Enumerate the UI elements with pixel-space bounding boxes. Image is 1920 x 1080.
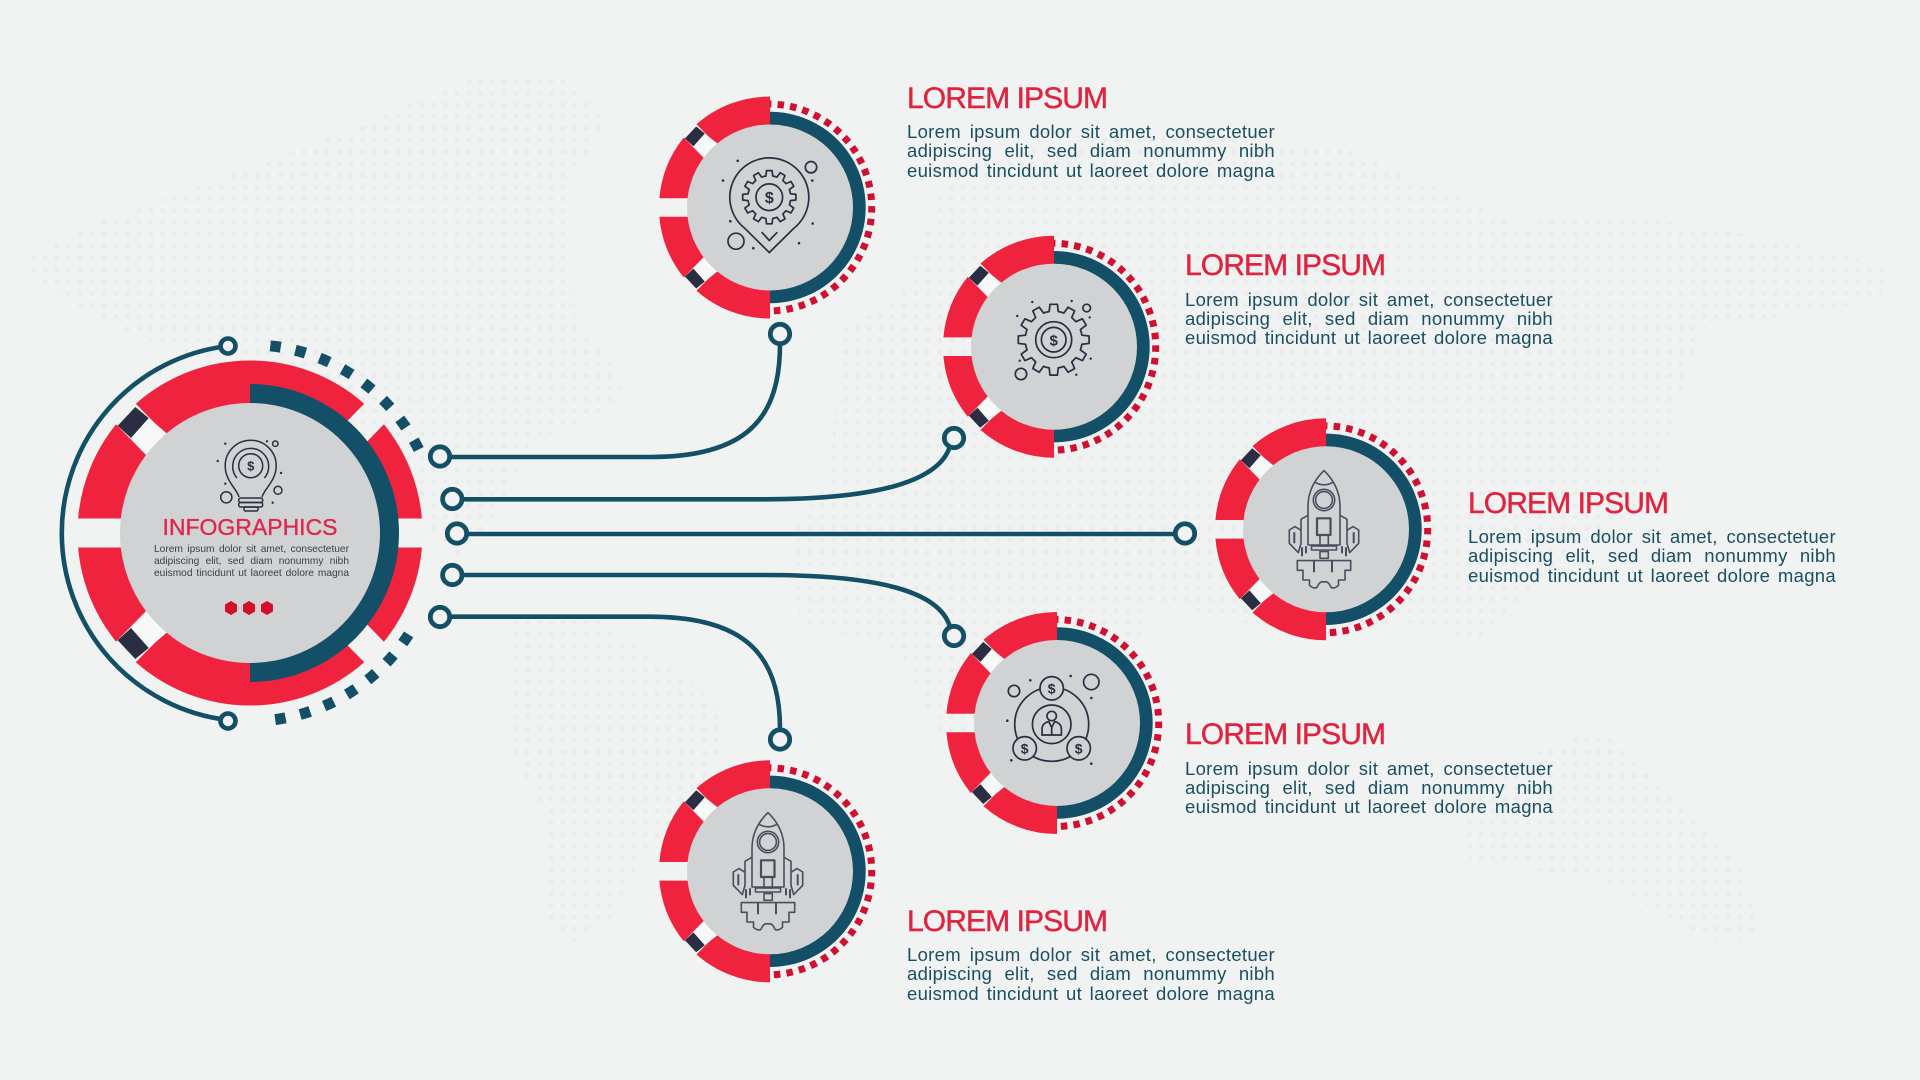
- text block: step 1: [907, 82, 1275, 181]
- text block: step 1: Lorem ipsum dolor sit amet, consectetuer: [907, 121, 1275, 142]
- icon: map pin with gear: [722, 158, 817, 253]
- outer arc with end nodes: [62, 338, 236, 728]
- main description: Lorem ipsum dolor sit amet, consectetuer: [154, 544, 349, 555]
- icon: gear with dollar: $: [1050, 333, 1059, 350]
- icon: people and money network: $: [1075, 740, 1083, 756]
- text block: step 4: adipiscing elit, sed diam nonummy nibh: [1185, 777, 1553, 798]
- text block: step 3: adipiscing elit, sed diam nonummy nibh: [1468, 545, 1836, 566]
- text block: step 2: euismod tincidunt ut laoreet dolore magna: [1185, 327, 1553, 348]
- background world map of dots: [30, 80, 1890, 945]
- icon: rocket: [733, 813, 803, 930]
- panel: main circle: [62, 338, 422, 728]
- text block: step 2: adipiscing elit, sed diam nonummy nibh: [1185, 308, 1553, 329]
- connector to step 2: [462, 446, 950, 499]
- panel: step 1 circle: [659, 96, 872, 318]
- connector end nodes: [430, 324, 1195, 749]
- text block: step 3: Lorem ipsum dolor sit amet, consectetuer: [1468, 526, 1836, 547]
- text block: step 3: LOREM IPSUM: [1468, 487, 1668, 520]
- panel: step 3 circle: [1215, 418, 1428, 640]
- text block: step 4: euismod tincidunt ut laoreet dolore magna: [1185, 796, 1553, 817]
- text block: step 5: Lorem ipsum dolor sit amet, consectetuer: [907, 944, 1275, 965]
- teal arc: [250, 384, 399, 682]
- red ring segments: [78, 360, 422, 706]
- icon: people and money network: $: [1048, 680, 1056, 696]
- text block: step 5: adipiscing elit, sed diam nonummy nibh: [907, 963, 1275, 984]
- gray disc: [120, 403, 380, 663]
- text block: step 2: Lorem ipsum dolor sit amet, consectetuer: [1185, 289, 1553, 310]
- text block: step 5: [907, 905, 1275, 1004]
- connector to step 3: [467, 532, 1175, 536]
- icon: map pin with gear: $: [765, 190, 774, 207]
- icon: people and money network: [1006, 674, 1099, 765]
- text block: step 4: LOREM IPSUM: [1185, 718, 1385, 751]
- icon: light bulb: $: [247, 458, 255, 474]
- connector to step 5: [450, 617, 780, 729]
- main description: [154, 544, 350, 579]
- panel: step 5 circle: [659, 760, 872, 982]
- text block: step 5: euismod tincidunt ut laoreet dolore magna: [907, 983, 1275, 1004]
- connector to step 4: [462, 575, 950, 627]
- text block: step 4: Lorem ipsum dolor sit amet, consectetuer: [1185, 758, 1553, 779]
- panel: step 2 circle: [943, 236, 1156, 458]
- icon: gear with dollar: [1015, 300, 1092, 380]
- dashed arcs: [270, 346, 419, 720]
- icon: light bulb: [216, 440, 282, 511]
- text block: step 3: euismod tincidunt ut laoreet dolore magna: [1468, 565, 1836, 586]
- text block: step 2: LOREM IPSUM: [1185, 249, 1385, 282]
- text block: step 1: adipiscing elit, sed diam nonummy nibh: [907, 140, 1275, 161]
- text block: step 1: euismod tincidunt ut laoreet dolore magna: [907, 160, 1275, 181]
- panel: step 4 circle: [946, 612, 1159, 834]
- connector lines: [450, 344, 1175, 729]
- text block: step 4: [1185, 718, 1553, 817]
- connector to step 1: [450, 344, 780, 457]
- main title: INFOGRAPHICS: [162, 514, 338, 540]
- main description: euismod tincidunt ut laoreet dolore magna: [154, 568, 349, 579]
- text block: step 5: LOREM IPSUM: [907, 905, 1107, 938]
- dark ring markers: [118, 407, 149, 659]
- text block: step 2: [1185, 249, 1553, 348]
- text block: step 3: [1468, 487, 1836, 586]
- icon: people and money network: $: [1021, 740, 1029, 756]
- icon: rocket: [1289, 471, 1359, 588]
- text block: step 1: LOREM IPSUM: [907, 82, 1107, 115]
- main description: adipiscing elit, sed diam nonummy nibh: [154, 556, 349, 567]
- icon: three red hexagons: [225, 601, 273, 615]
